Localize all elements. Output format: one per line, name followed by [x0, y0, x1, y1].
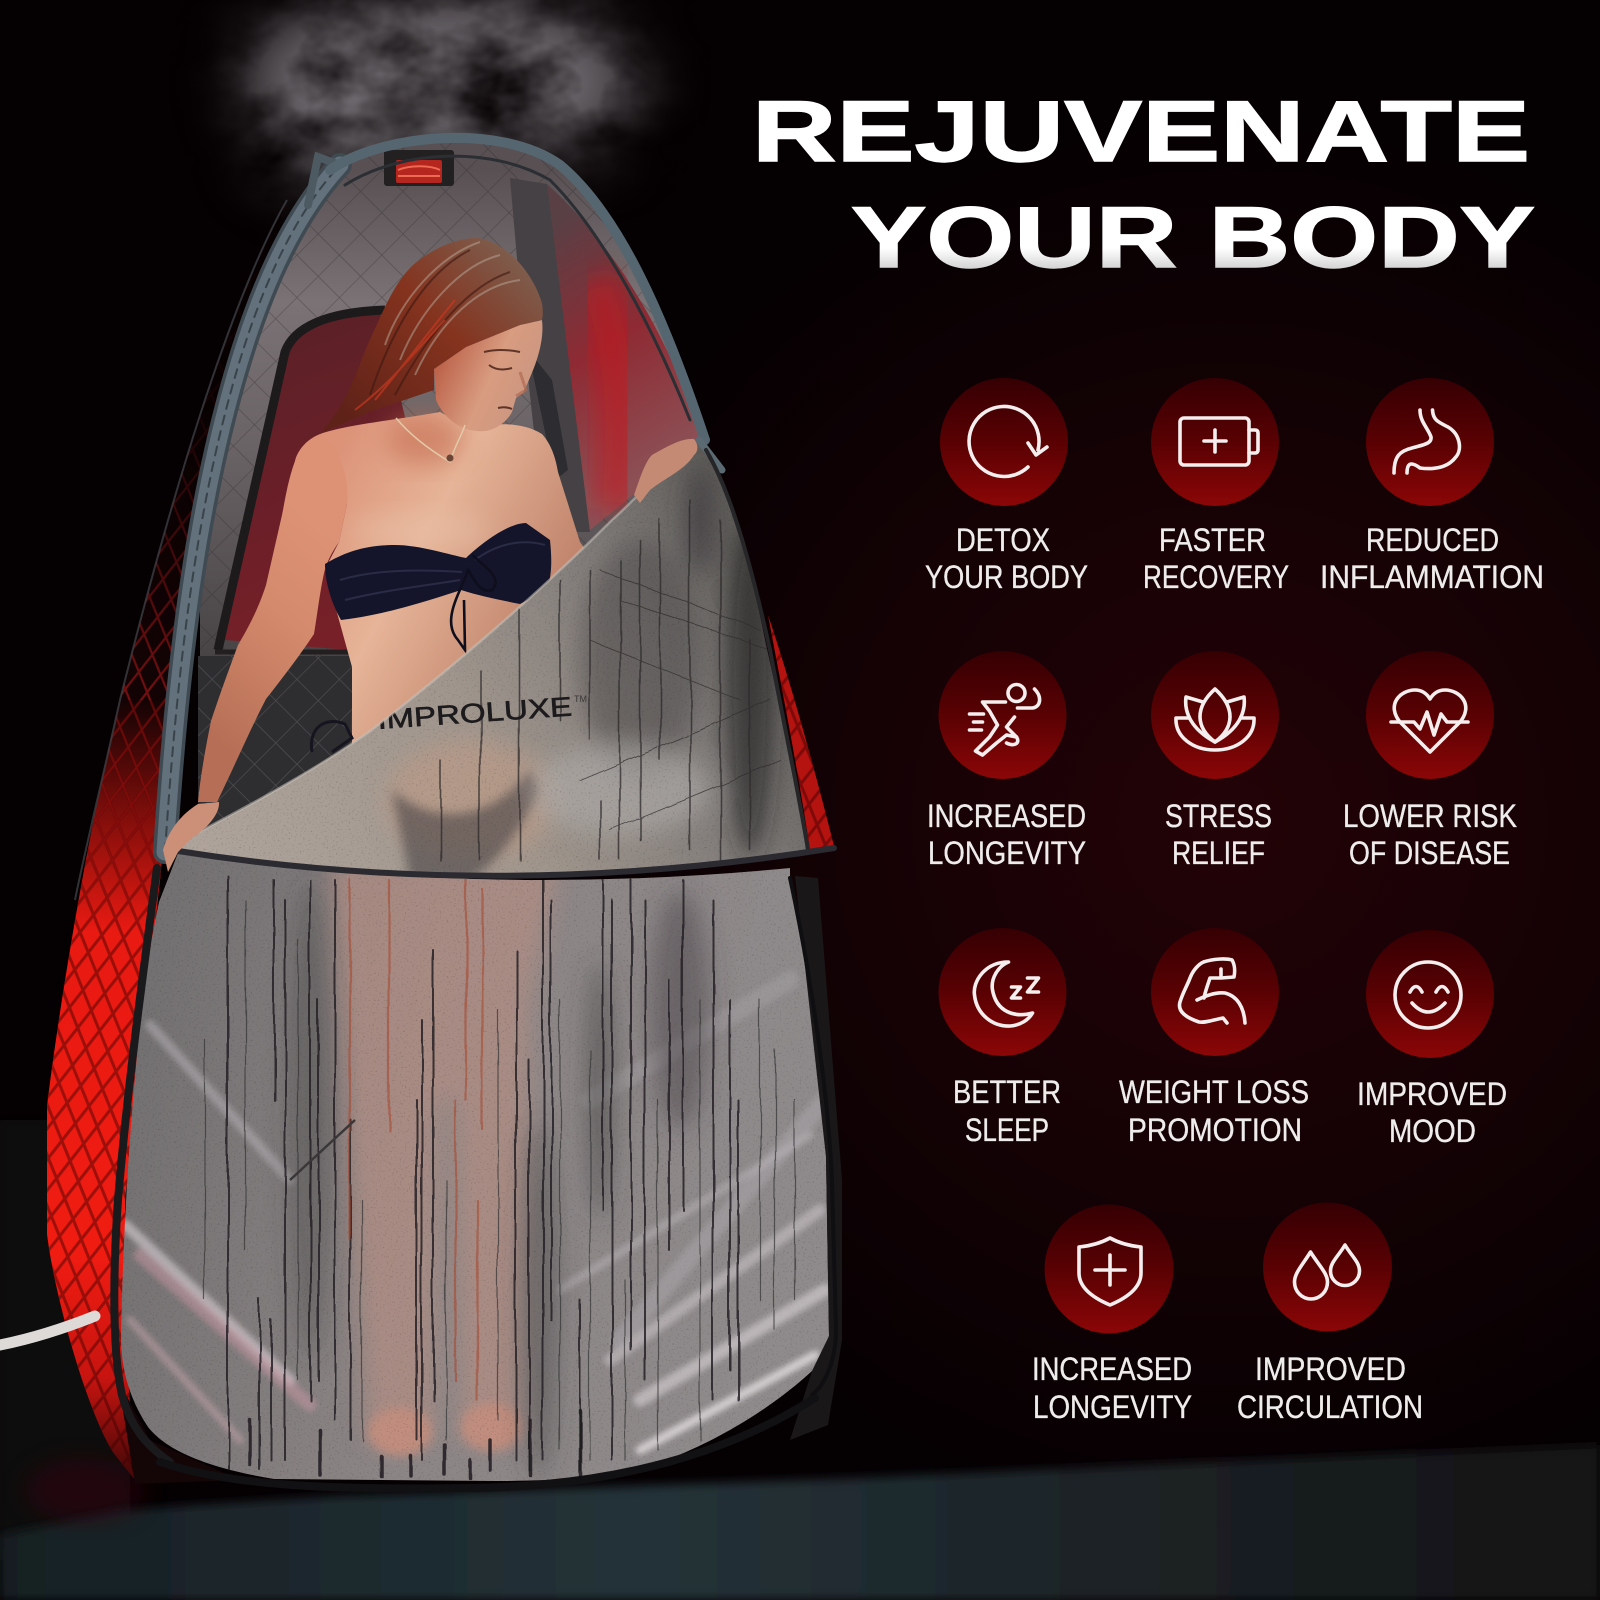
panel: tent interior — [198, 140, 705, 830]
icon: muscle arm — [1151, 928, 1279, 1056]
condensation drips — [205, 876, 795, 1478]
icon: lotus — [1151, 651, 1279, 779]
label: OF DISEASE — [1349, 835, 1510, 871]
icon: battery — [1151, 378, 1279, 506]
label — [1357, 1076, 1507, 1149]
label: IMPROVED — [1357, 1076, 1507, 1112]
right side strip of tent — [790, 876, 842, 1440]
label: LOWER RISK — [1343, 798, 1517, 834]
label — [927, 798, 1086, 871]
legs seen through plastic — [330, 860, 560, 1440]
label: PROMOTION — [1128, 1112, 1302, 1148]
left hand gripping flap — [163, 802, 219, 872]
icon: smiling face — [1366, 930, 1494, 1058]
label: MOOD — [1389, 1113, 1476, 1149]
necklace — [396, 418, 465, 462]
label: REDUCED — [1366, 522, 1499, 558]
label: YOUR BODY — [925, 559, 1088, 595]
tent frame and zippers — [114, 138, 836, 1488]
label: BETTER — [953, 1074, 1061, 1110]
label: SLEEP — [965, 1112, 1049, 1148]
left arm — [198, 434, 348, 802]
bikini top — [325, 523, 551, 620]
benefit: increased longevity (shield) — [1032, 1204, 1192, 1425]
label — [1143, 522, 1289, 595]
floor — [0, 1120, 1600, 1600]
heater lamp — [384, 150, 454, 186]
label — [1165, 798, 1272, 871]
panel: lower front window — [110, 850, 840, 1490]
label — [1343, 798, 1517, 871]
label: INCREASED — [927, 798, 1086, 834]
steam cloud — [240, 0, 640, 180]
label: LONGEVITY — [928, 835, 1086, 871]
label: WEIGHT LOSS — [1119, 1074, 1309, 1110]
label — [1320, 522, 1544, 595]
title: YOUR BODY — [851, 190, 1535, 286]
power hose — [0, 1316, 95, 1345]
flap far edge red mesh — [768, 615, 834, 850]
label: LONGEVITY — [1033, 1389, 1192, 1425]
logo on flap: IMPROLUXE — [376, 691, 573, 735]
label: DETOX — [956, 522, 1050, 558]
woman — [198, 238, 600, 802]
right zipper — [790, 878, 836, 1395]
label: RECOVERY — [1143, 559, 1289, 595]
benefit: stress relief — [1151, 651, 1279, 871]
zipper across the window — [178, 848, 834, 876]
icon: detox circular arrow — [940, 378, 1068, 506]
benefit: reduced inflammation — [1320, 378, 1544, 595]
speckle texture — [110, 850, 840, 1490]
title: REJUVENATE — [752, 84, 1530, 180]
icon: two drops — [1263, 1202, 1392, 1332]
icon: moon — [938, 928, 1066, 1056]
label: IMPROVED — [1255, 1351, 1406, 1387]
label — [953, 1074, 1061, 1148]
label: CIRCULATION — [1237, 1389, 1423, 1425]
label — [1032, 1351, 1192, 1425]
dark shade patches — [288, 880, 710, 1480]
label: STRESS — [1165, 798, 1272, 834]
benefit: detox your body — [925, 378, 1088, 595]
icon: heart pulse — [1366, 651, 1494, 779]
benefit: improved circulation — [1237, 1202, 1423, 1425]
label: INFLAMMATION — [1320, 559, 1544, 595]
label: FASTER — [1159, 522, 1266, 558]
label — [1119, 1074, 1309, 1148]
label — [1237, 1351, 1423, 1425]
benefit: faster recovery — [1143, 378, 1289, 595]
benefit: increased longevity (runner) — [927, 651, 1086, 871]
bikini bottom through plastic — [392, 770, 540, 880]
hair strands — [355, 242, 520, 410]
icon: stomach — [1366, 378, 1494, 506]
label: INCREASED — [1032, 1351, 1192, 1387]
left zipper — [114, 868, 170, 1462]
hair — [320, 238, 543, 434]
panel: red glowing mesh side — [47, 200, 287, 1484]
title — [752, 84, 1535, 286]
panel: folded-up flap — [182, 445, 806, 873]
torso — [320, 412, 600, 745]
bottom seam — [160, 1398, 815, 1488]
right hand gripping flap — [634, 439, 697, 503]
plastic highlights — [125, 980, 825, 1450]
panel: folded-up flap: TM — [574, 694, 587, 704]
icon: shield plus — [1044, 1204, 1174, 1334]
neck shadow and face — [434, 320, 542, 431]
benefit: improved mood — [1357, 930, 1507, 1149]
label — [925, 522, 1088, 595]
icon: runner — [938, 651, 1066, 779]
benefit: weight loss promotion — [1119, 928, 1309, 1148]
label: RELIEF — [1172, 835, 1265, 871]
bikini tie — [311, 722, 352, 752]
benefit: better sleep — [938, 928, 1066, 1148]
benefit: lower risk of disease — [1343, 651, 1517, 871]
